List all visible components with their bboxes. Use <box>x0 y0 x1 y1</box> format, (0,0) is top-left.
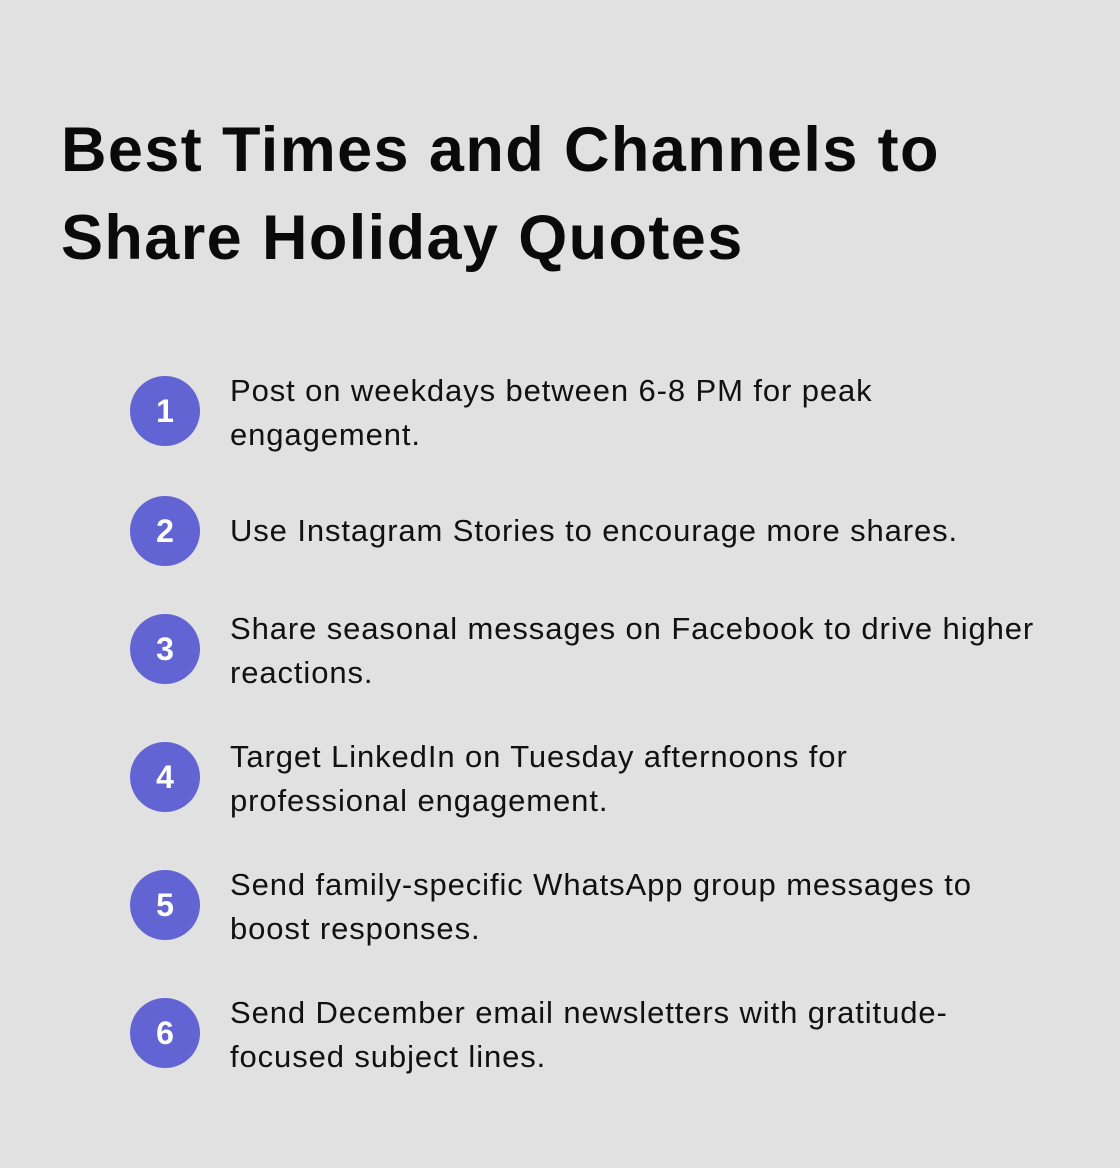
item 1 <box>130 373 873 452</box>
item 5: boost responses. <box>230 911 480 946</box>
title: Best Times and Channels to <box>61 115 940 185</box>
item 4: 4 <box>156 759 174 795</box>
item 3: Share seasonal messages on Facebook to drive higher <box>230 611 1034 646</box>
item 5: Send family-specific WhatsApp group messages to <box>230 867 972 902</box>
item 5 <box>130 867 972 946</box>
item 4: professional engagement. <box>230 783 608 818</box>
item 1: Post on weekdays between 6-8 PM for peak <box>230 373 873 408</box>
title: Share Holiday Quotes <box>61 203 744 273</box>
item 3: reactions. <box>230 655 373 690</box>
item 6: focused subject lines. <box>230 1039 546 1074</box>
item 6 <box>130 995 948 1074</box>
item 3 <box>130 611 1034 690</box>
item 2: Use Instagram Stories to encourage more shares. <box>230 513 958 548</box>
title <box>61 115 940 273</box>
item 2: 2 <box>156 513 174 549</box>
item 1: 1 <box>156 393 174 429</box>
item 5: 5 <box>156 887 174 923</box>
item 2 <box>130 496 958 566</box>
item 1: engagement. <box>230 417 421 452</box>
item 6: Send December email newsletters with gratitude- <box>230 995 948 1030</box>
item 3: 3 <box>156 631 174 667</box>
item 6: 6 <box>156 1015 174 1051</box>
item 4 <box>130 739 848 818</box>
item 4: Target LinkedIn on Tuesday afternoons for <box>230 739 848 774</box>
